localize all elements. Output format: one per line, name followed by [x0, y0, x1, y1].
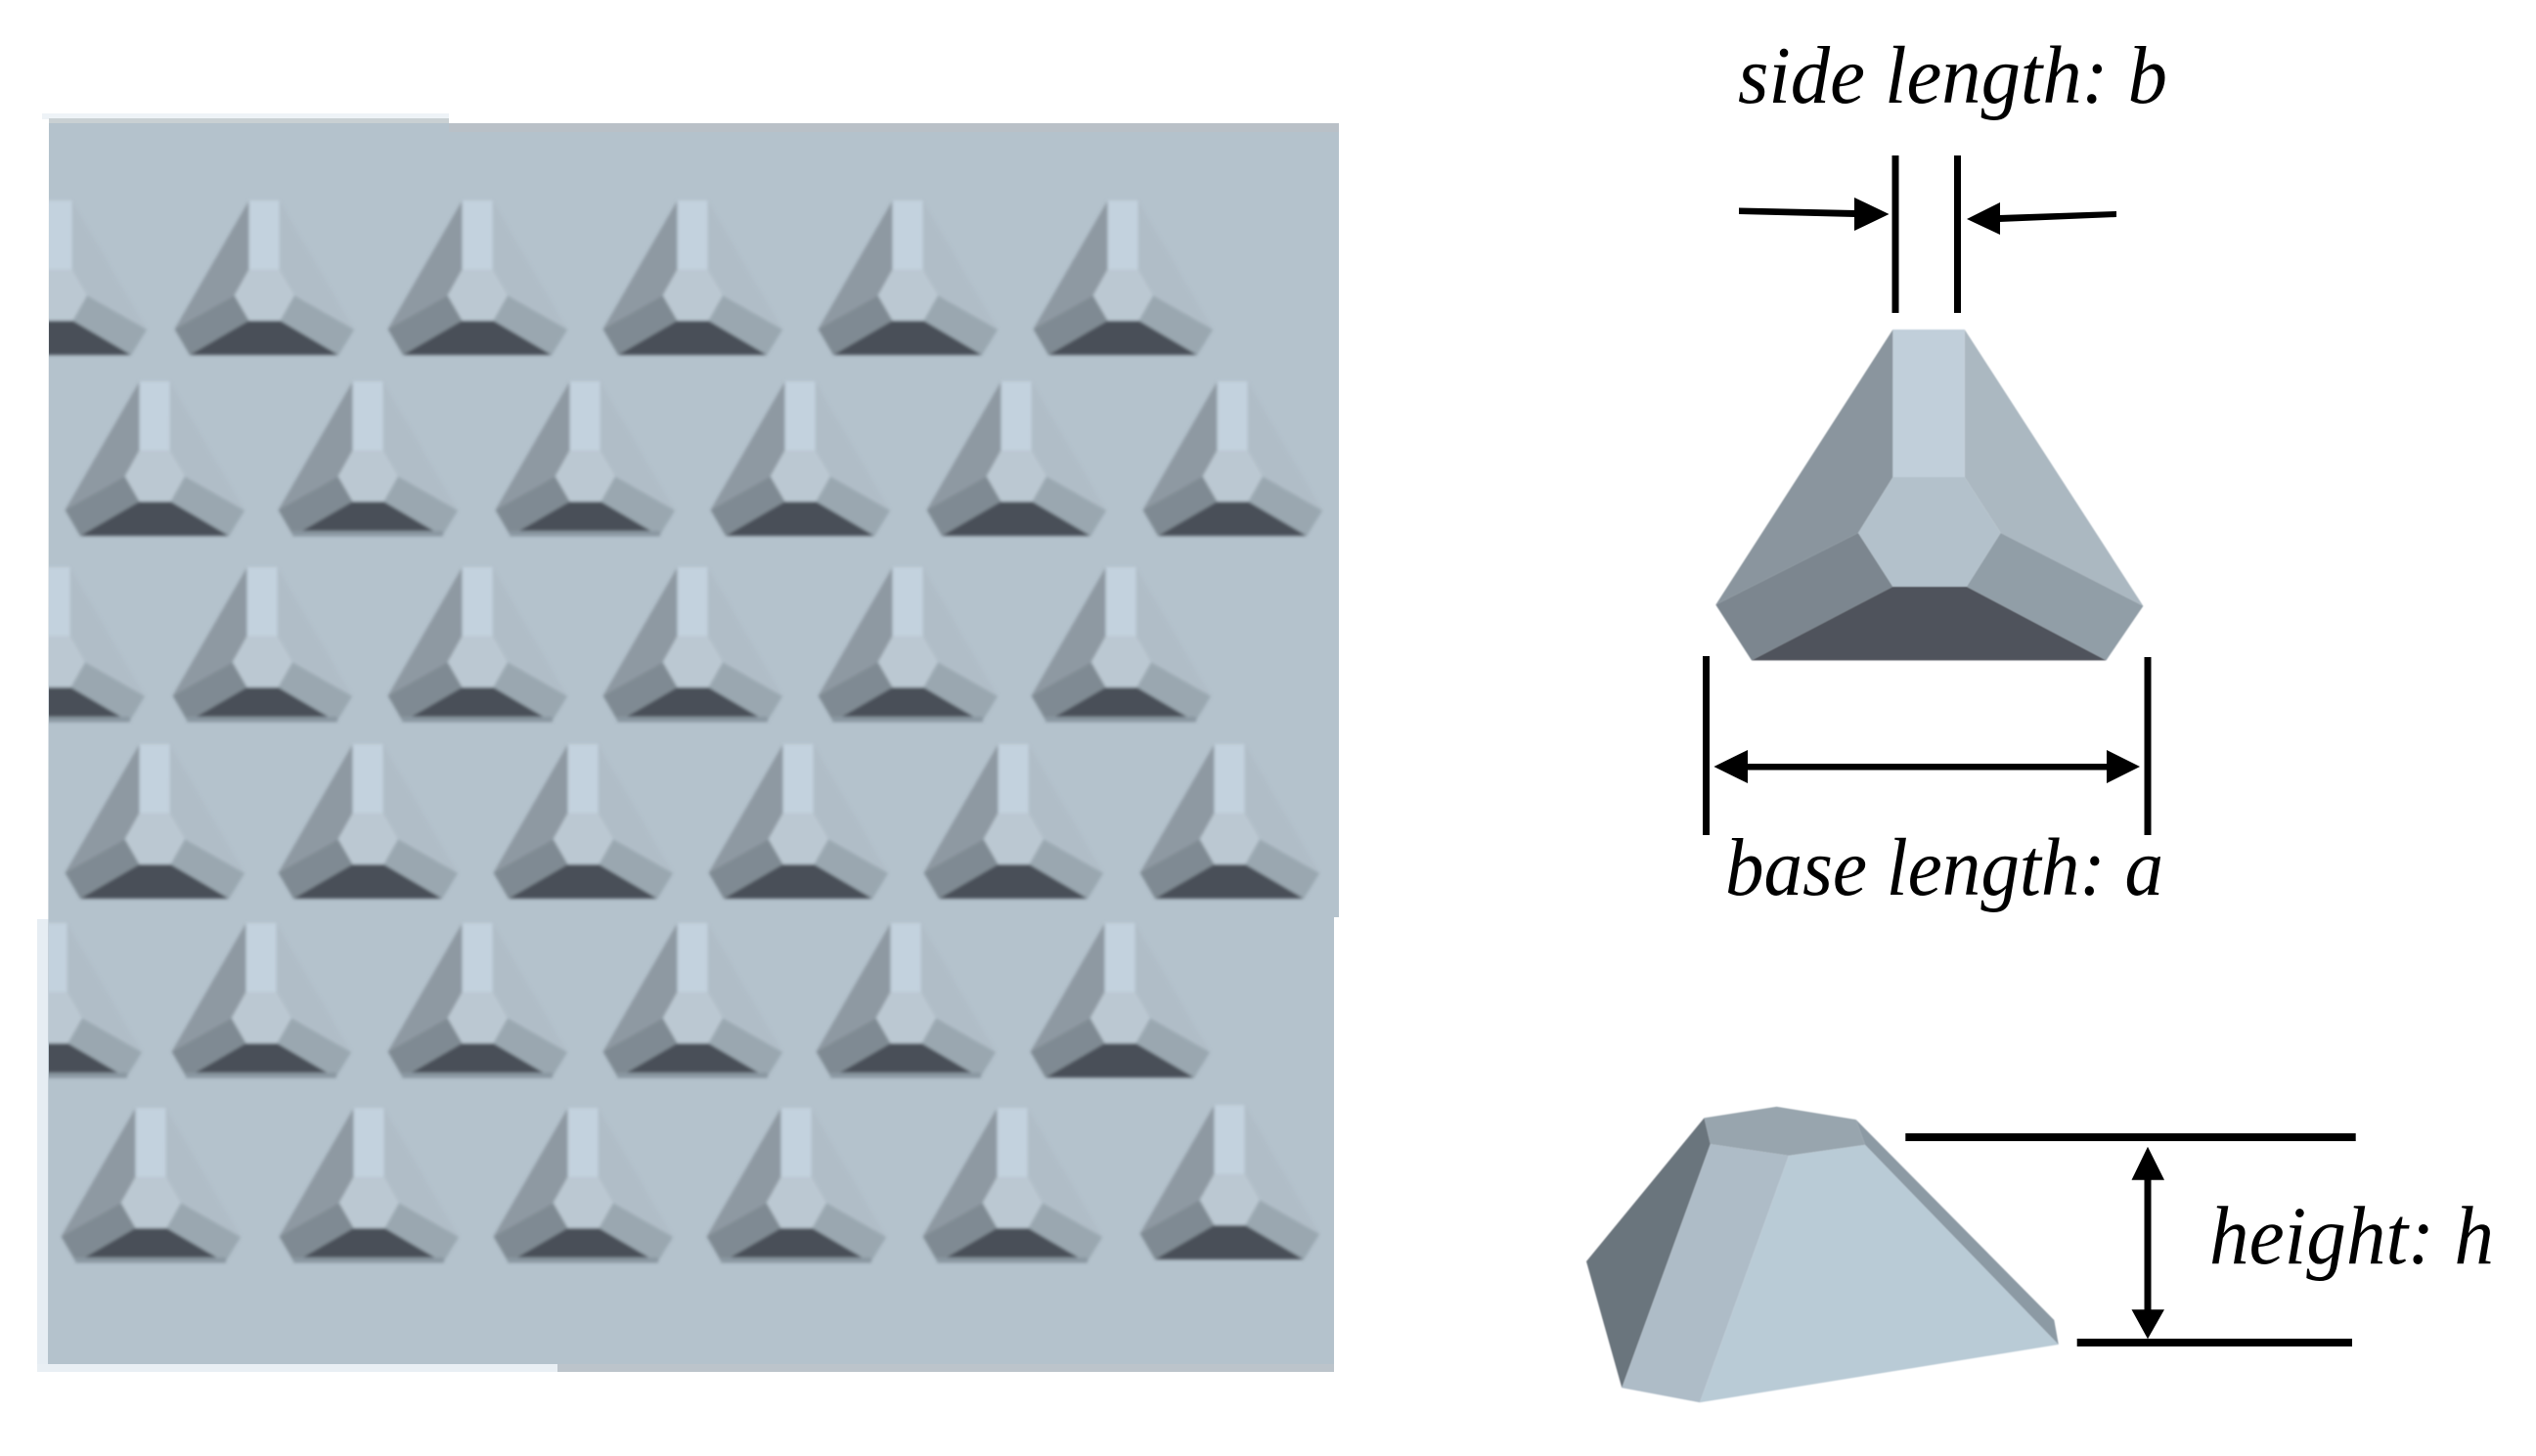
icon: large pyramid, top view [1715, 330, 2143, 660]
row 1 of pyramids [0, 200, 1213, 355]
pyramid grid [0, 200, 1322, 1263]
arrow: height [2132, 1147, 2164, 1339]
panel: textured surface array [0, 113, 1339, 1372]
row 3 of pyramids [0, 567, 1211, 722]
arrow: base length [1713, 750, 2140, 783]
arrow: side length right [1967, 202, 2116, 235]
row 5 of pyramids [0, 923, 1210, 1078]
base length extension lines [1703, 656, 2152, 835]
row 6 of pyramids [62, 1105, 1319, 1263]
arrow: side length left [1739, 198, 1890, 231]
label: base length: base length: a [1725, 822, 2163, 913]
height extension lines [1905, 1133, 2356, 1346]
row 4 of pyramids [66, 744, 1319, 899]
side length extension lines [1891, 155, 1961, 313]
label: side length: side length: b [1738, 30, 2167, 121]
icon: pyramid, side view [1586, 1107, 2059, 1402]
row 2 of pyramids [66, 381, 1322, 536]
label: height: height: h [2209, 1190, 2494, 1282]
